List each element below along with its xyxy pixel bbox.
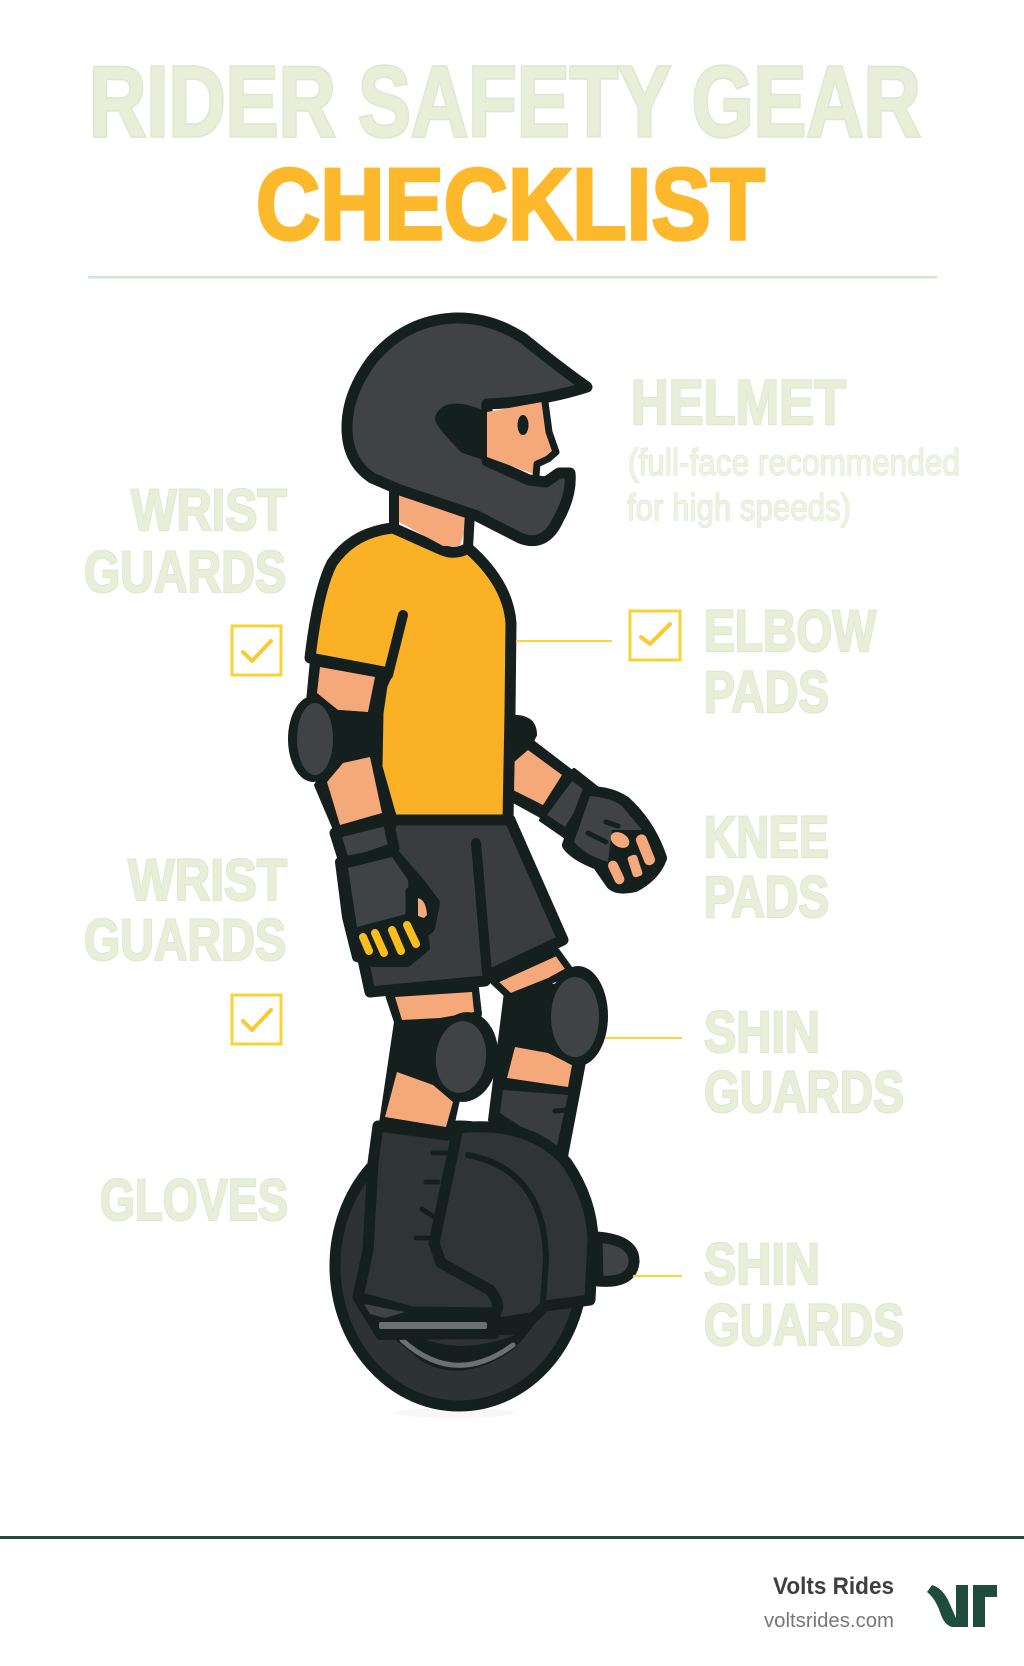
callout line: shin lower [633,1275,682,1277]
label: elbow pads [704,599,876,725]
far knee pad [548,966,608,1066]
brand name: Volts Rides [773,1573,894,1600]
label: knee pads [704,805,829,930]
near arm with elbow pad [288,660,435,962]
checkbox: wrist guards upper [232,626,281,675]
label: knee pads: PADS [704,865,829,930]
dark crescent under the footplate [390,1310,545,1371]
shirt [310,528,511,820]
illustration: rider on electric unicycle [288,318,661,1418]
title [89,46,921,261]
label: shin guards lower [704,1232,904,1358]
checkbox: elbow pads [630,611,680,660]
far arm with glove [508,717,661,888]
elbow pad [288,696,383,782]
eye [518,415,528,435]
helmet and face [347,318,587,541]
face [487,402,555,475]
label: shin guards lower: GUARDS [704,1293,904,1358]
shorts [362,820,563,992]
glove [335,820,435,962]
label: helmet: HELMET [631,368,846,438]
label: elbow pads: ELBOW [704,599,876,664]
title line: checklist: CHECKLIST [256,149,765,261]
label: helmet [627,368,960,528]
label: shin guards upper [704,1000,904,1125]
label note: high speeds: for high speeds) [627,487,851,528]
label: knee pads: KNEE [704,805,829,870]
label: elbow pads: PADS [704,660,829,725]
label: wrist guards lower [84,848,287,973]
website: voltsrides.com [764,1610,894,1632]
callout line: elbow [516,640,612,642]
icon: VR logo [927,1585,997,1627]
boot [358,1126,498,1336]
footer [0,1536,1024,1632]
label: gloves: GLOVES [100,1168,288,1233]
label: wrist guards upper: WRIST [131,478,287,543]
far leg with knee pad and shin guard [490,966,608,1162]
far thigh skin [493,952,570,997]
label: shin guards upper: GUARDS [704,1060,904,1125]
near leg with knee pad and boot [358,988,503,1336]
near knee pad [427,1009,503,1105]
checkbox: wrist guards lower [232,995,281,1044]
label: wrist guards lower: GUARDS [84,908,286,973]
callout line: shin upper [605,1037,682,1039]
visor opening [435,404,487,461]
label: shin guards lower: SHIN [704,1232,820,1297]
label: shin guards upper: SHIN [704,1000,820,1065]
label: wrist guards upper: GUARDS [84,540,286,605]
electric unicycle wheel and handle [335,1126,634,1418]
label: wrist guards upper [84,478,287,605]
label: wrist guards lower: WRIST [128,848,287,913]
neck [394,480,470,548]
helmet shell [347,318,587,541]
label note: full-face: (full-face recommended [628,442,960,483]
